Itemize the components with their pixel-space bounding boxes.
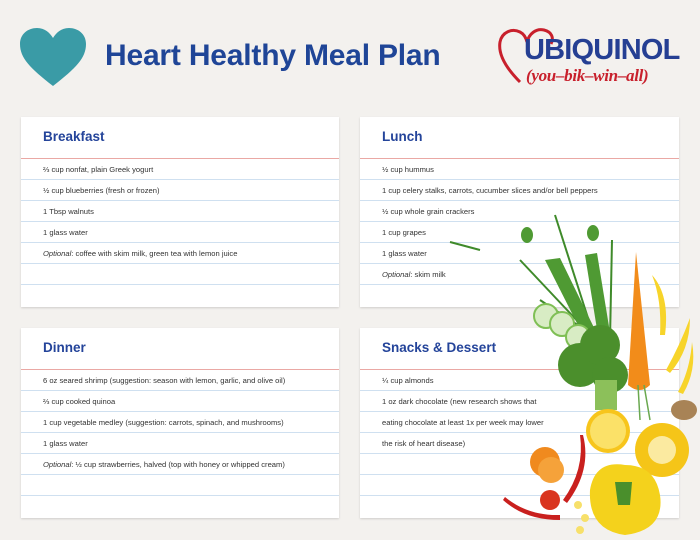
panel: snacks: Snacks & Dessert [382,340,496,355]
logo [498,28,680,85]
icon: heart [20,28,86,86]
panel: snacks: ¼ cup almonds [382,376,434,385]
panel: snacks [360,328,679,518]
panel: breakfast: Optional: coffee with skim milk, green tea with lemon juice [43,249,237,258]
panel: dinner [21,328,339,518]
panel: snacks: eating chocolate at least 1x per week may lower [382,418,544,427]
panel: snacks: the risk of heart disease) [382,439,465,448]
panel: breakfast: Breakfast [43,129,105,144]
panel: breakfast [21,117,339,307]
panel: breakfast: 1 Tbsp walnuts [43,207,94,216]
panel: breakfast: ½ cup blueberries (fresh or frozen) [43,186,160,195]
panel: lunch: 1 glass water [382,249,427,258]
panel: dinner: 1 glass water [43,439,88,448]
panel: lunch: 1 cup grapes [382,228,426,237]
panel: dinner: Dinner [43,340,86,355]
panel: lunch: Lunch [382,129,422,144]
panel: lunch: 1 cup celery stalks, carrots, cucumber slices and/or bell peppers [382,186,598,195]
title: Heart Healthy Meal Plan [105,39,441,72]
logo: (you–bik–win–all) [526,66,648,85]
panel: dinner: 6 oz seared shrimp (suggestion: season with lemon, garlic, and olive oil) [43,376,285,385]
panel: dinner: Optional: ½ cup strawberries, halved (top with honey or whipped cream) [43,460,285,469]
panel: breakfast: ⅔ cup nonfat, plain Greek yogurt [43,165,153,174]
panel: lunch: ½ cup hummus [382,165,434,174]
panel: breakfast: 1 glass water [43,228,88,237]
panel: lunch [360,117,679,307]
panel: lunch: ½ cup whole grain crackers [382,207,474,216]
panel: dinner: ⅔ cup cooked quinoa [43,397,115,406]
panel: snacks: 1 oz dark chocolate (new research shows that [382,397,536,406]
panel: dinner: 1 cup vegetable medley (suggestion: carrots, spinach, and mushrooms) [43,418,284,427]
logo: UBIQUINOL [524,34,680,66]
panel: lunch: Optional: skim milk [382,270,446,279]
